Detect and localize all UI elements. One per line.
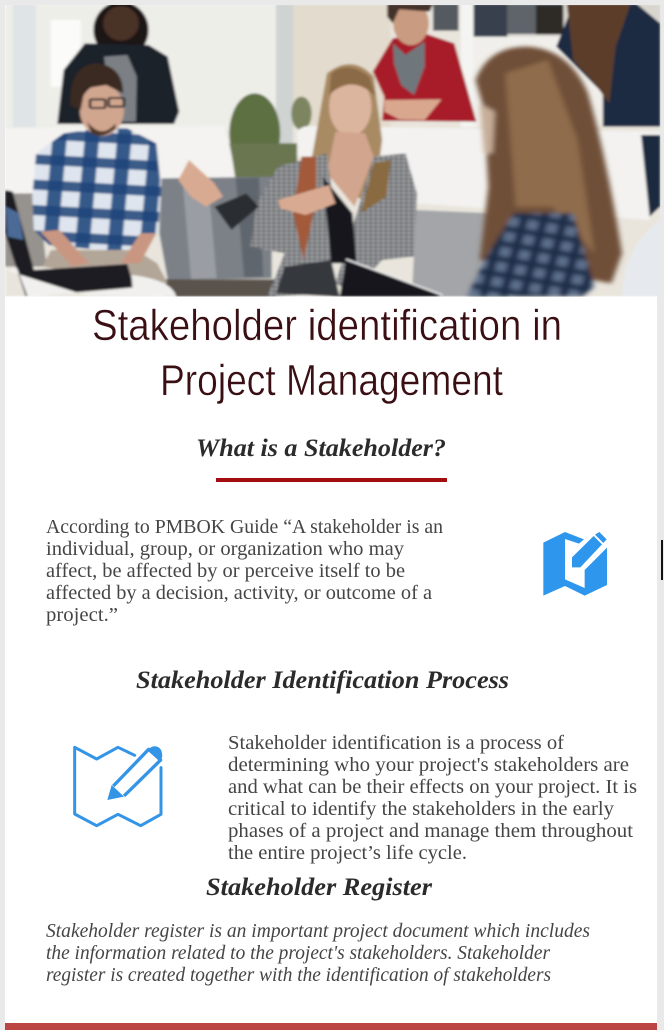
- heading underline: [216, 478, 447, 482]
- icon: outlined map with pencil: [75, 746, 162, 826]
- text block: identification process: determining who your project's stakeholders are: [228, 755, 629, 776]
- text block: stakeholder register: [46, 921, 590, 986]
- right chair: [622, 220, 660, 297]
- standing woman left: [92, 5, 150, 48]
- text block: stakeholder definition: individual, group, or organization who may: [46, 539, 404, 560]
- standing man in red sweater: [373, 33, 476, 122]
- text block: identification process: phases of a project and manage them throughout: [228, 821, 634, 842]
- centre woman: hair and cardigan: [312, 64, 382, 207]
- footer bar: [5, 1023, 657, 1030]
- icon: solid map with pencil: [543, 532, 607, 596]
- left sofa: [5, 129, 237, 194]
- edge mark: [661, 540, 663, 580]
- text block: identification process: Stakeholder identification is a process of: [228, 733, 565, 754]
- hands: [178, 160, 223, 207]
- plant: [228, 92, 282, 146]
- woman in foreground, blurred: [467, 47, 622, 297]
- heading: stakeholder register: Stakeholder Register: [206, 874, 432, 901]
- text block: stakeholder definition: affected by a decision, activity, or outcome of a: [46, 583, 432, 604]
- text block: stakeholder definition: [46, 517, 443, 626]
- cushion: [159, 177, 272, 280]
- folder: [340, 259, 442, 297]
- title: Stakeholder identification in: [92, 301, 562, 350]
- text block: stakeholder register: register is created together with the identification of stakeholders: [46, 965, 551, 986]
- photo: team meeting of stakeholders: [5, 1, 660, 297]
- text block: identification process: and what can be their effects on your project. It is: [228, 777, 637, 798]
- laptop: [5, 190, 134, 296]
- text block: stakeholder definition: project.”: [46, 605, 118, 626]
- heading: what is a stakeholder: What is a Stakeholder?: [196, 435, 446, 462]
- heading: stakeholder identification process: Stakeholder Identification Process: [136, 667, 509, 694]
- text block: stakeholder register: the information related to the project's stakeholders. Stakeholder: [46, 943, 550, 964]
- man on the left: plaid shirt: [32, 128, 161, 253]
- standing woman right: [556, 4, 660, 127]
- right sofa: [297, 126, 660, 220]
- text block: identification process: the entire project’s life cycle.: [228, 843, 467, 864]
- title: [92, 301, 562, 405]
- text block: identification process: critical to identify the stakeholders in the early: [228, 799, 614, 820]
- text block: stakeholder definition: affect, be affected by or perceive itself to be: [46, 561, 405, 582]
- text block: stakeholder register: Stakeholder register is an important project document which includes: [46, 921, 590, 942]
- text block: identification process: [228, 733, 637, 864]
- title: Project Management: [160, 356, 503, 405]
- text block: stakeholder definition: According to PMBOK Guide “A stakeholder is an: [46, 517, 443, 538]
